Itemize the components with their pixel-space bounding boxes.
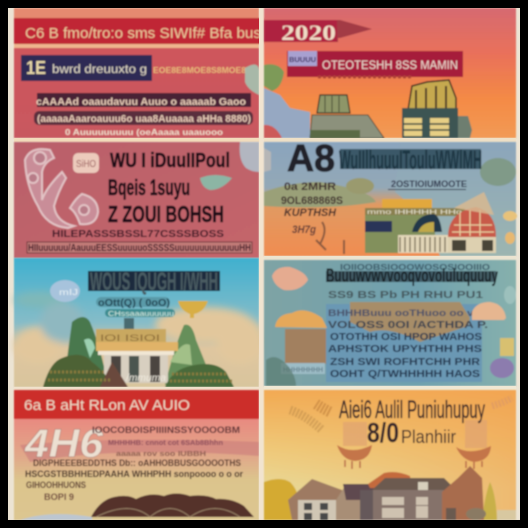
big number: A8	[287, 138, 335, 180]
wheat scribble	[290, 410, 322, 430]
panel: second left rose	[14, 142, 259, 258]
side dabs	[503, 211, 517, 221]
grey corner shape	[240, 142, 259, 172]
panel: third left sky and hall	[14, 258, 264, 387]
blue land	[264, 88, 310, 138]
table rows: OOHT Q/TWHHHHH HAOS	[330, 368, 480, 380]
divider	[264, 256, 516, 260]
table rows: BHHHBuuu ooTHuoo oo vr	[328, 308, 479, 318]
red banner: 6a B aHt RLon AV AUIO	[24, 397, 190, 414]
left text stack: 9OL688869S	[281, 195, 343, 207]
red banner	[14, 390, 259, 419]
scalloped banner trim	[318, 76, 412, 78]
heading lines: Z ZOUI BOHSH	[108, 201, 224, 227]
divider	[264, 138, 516, 142]
table rows: APHSTOK UPYHTHH PHS	[328, 343, 482, 355]
text block on dark bars: (aaaaaAaaroauuu6o uaa8Auaaaa aHHa 8880)	[37, 113, 251, 125]
icon: cloud badge	[50, 280, 80, 302]
blue table block	[326, 304, 482, 382]
vertical divider	[259, 8, 264, 520]
table rows	[328, 290, 488, 380]
icon: cloud badge: mIJ	[59, 288, 78, 297]
title	[339, 396, 485, 448]
panel: third right table	[264, 260, 516, 386]
heading banner: OTEOTESHH 8SS MAMIN	[322, 58, 458, 72]
small text block: HIIuuuuuu/AauuuEESSuuuuuoSSSSSuuuuuuuuuuuuuHH	[28, 243, 251, 254]
heading lines: WU I iDuuIIPoul	[110, 150, 230, 172]
right building	[402, 80, 472, 138]
sub pills: CHssaaauuuuuu	[108, 309, 174, 318]
clouds	[14, 292, 264, 364]
header text: IOIIOOBSIOOOWOSOSIOOIIIO	[340, 263, 490, 272]
table rows: SS9 BS Pb PH RHU PU1	[328, 290, 484, 301]
foliage lower left	[266, 357, 296, 386]
map greenery	[264, 64, 284, 91]
small text block	[27, 229, 252, 254]
text block on dark bars: cAAAAd oaaudavuu Auuo o aaaaab Gaoo	[36, 96, 246, 108]
yellow trees	[264, 479, 516, 520]
panel: top left red	[14, 8, 264, 138]
brown blob	[350, 302, 470, 342]
building caption: /mmuma	[125, 373, 166, 384]
small label tag: SiHO	[76, 159, 96, 170]
heading banner: BUUUU	[289, 57, 316, 64]
body text: MHHHHB: cnnot cot 6SAb8Bhhn	[108, 438, 223, 447]
body text: IOOCOBOISPIIIINSSYOOOOBM	[92, 425, 240, 435]
navy heading box	[21, 55, 152, 81]
baskets	[337, 420, 491, 469]
icon: scroll ornament	[25, 149, 98, 228]
map fragment	[245, 64, 259, 95]
sub pills: oOtt(Q) ( 0oO)	[98, 298, 170, 309]
table rows: OTOTHH OSI HPOP WAHOS	[330, 332, 482, 343]
pale arc	[20, 514, 92, 520]
left text stack: 0a 2MHR	[284, 181, 336, 193]
small label tag	[73, 153, 99, 173]
scatter mark	[316, 222, 344, 254]
bushes	[43, 355, 234, 387]
divider	[264, 386, 516, 390]
left building	[310, 95, 384, 138]
town illustration: mmo IHHHHH HHo	[367, 210, 463, 216]
caption strip: HHHHHHHH	[283, 365, 323, 374]
text block on dark bars	[34, 93, 253, 137]
heading banner	[287, 51, 463, 77]
title: 8/0	[367, 417, 399, 448]
text block on dark bars: 0 Auuuuuuuuu (oeAaaaa uaauooo	[65, 127, 223, 137]
panel: bottom right orange with houses	[264, 390, 516, 520]
small text block: HILEPASSSBSSL77CSSSBOSS	[52, 229, 224, 240]
panel: top right orange	[264, 8, 516, 138]
body text: DIGPHEEEBEDDTHS Db:: oAHHOBBUSGOOOOTHS	[33, 458, 241, 469]
olive band	[264, 182, 376, 207]
heading lines: Bqeis 1suyu	[108, 175, 190, 200]
year arrow banner	[264, 20, 372, 45]
subheading: 2OSTIOIUMOOTE	[391, 179, 467, 190]
orange cloud	[275, 310, 327, 328]
year arrow banner: 2020	[281, 20, 336, 45]
body text: GIHOOHHUONS	[26, 480, 86, 491]
houses	[288, 466, 486, 520]
divider	[14, 138, 259, 142]
left text stack: 3H7g	[292, 224, 316, 236]
town illustration	[365, 192, 496, 253]
navy heading box: 1E	[26, 58, 46, 78]
right side blobs	[472, 286, 516, 378]
dotted caption: EOE8E8MOE8S8MOE8W8	[153, 66, 260, 75]
table rows: VOLOSS 0OI /ACTHDA P.	[328, 320, 488, 331]
body text: HSCGSTBBHHEDPAAHA WHHPHH sonpoooo o o or	[25, 469, 243, 479]
navy heading box: bwrd dreuuxto g	[52, 64, 147, 76]
body text: aaaaa rov soo IUBBH	[116, 451, 206, 458]
icon: trophy	[178, 301, 208, 318]
panel: bottom left red and tan	[14, 390, 259, 520]
sub pills	[96, 297, 175, 318]
mountains	[64, 317, 214, 385]
title banner	[14, 18, 264, 44]
building	[96, 318, 178, 383]
cloud badge pink	[272, 267, 308, 290]
leaf	[200, 175, 232, 190]
heading bar	[88, 268, 220, 296]
large number: 4H6	[24, 422, 104, 466]
title banner: C6 B fmo/tro:o sms SIWIf# Bfa bus	[25, 25, 261, 42]
dark mounds	[91, 494, 254, 517]
left text stack	[281, 181, 343, 236]
grey shape edge	[264, 148, 271, 172]
title: Planhiir	[401, 427, 456, 447]
body text	[25, 425, 243, 502]
building: IOI ISIOI	[100, 333, 160, 343]
brown block	[285, 329, 326, 364]
heading bar: WOUS IQUGH I/WHH	[90, 268, 218, 296]
left text stack: KUPTHSH	[284, 207, 337, 219]
panel: second right blue and orange	[264, 138, 517, 256]
table rows: ZSH SWI ROFHTCHH PHR	[330, 356, 480, 368]
heading lines	[108, 150, 230, 227]
body text: BOPI 9	[44, 492, 74, 502]
divider	[14, 387, 259, 390]
